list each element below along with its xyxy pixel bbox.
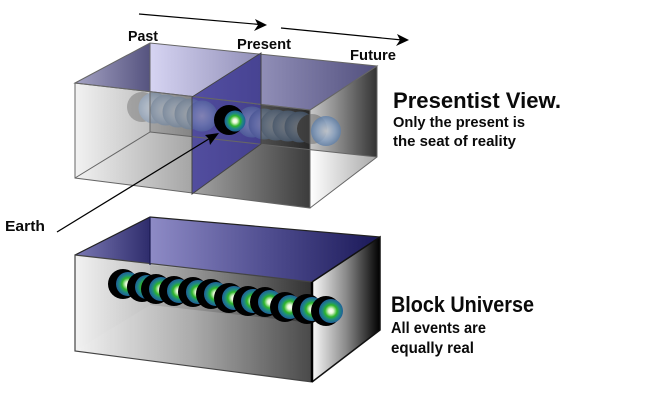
arrow: time present to future bbox=[281, 28, 409, 46]
arrow: time past to present bbox=[139, 14, 267, 31]
ghost earths bbox=[127, 92, 341, 146]
label: earth: Earth bbox=[5, 219, 45, 235]
label: future: Future bbox=[350, 48, 396, 64]
text: presentist description: the seat of reality bbox=[393, 133, 517, 150]
presentist box faces bbox=[75, 43, 377, 208]
present plane bbox=[192, 53, 261, 194]
label: past: Past bbox=[128, 29, 158, 45]
box edges bbox=[75, 217, 380, 382]
block universe bbox=[75, 217, 380, 382]
box edges bbox=[75, 43, 377, 208]
text: presentist description bbox=[393, 114, 525, 150]
heading: block universe: Block Universe bbox=[391, 292, 534, 317]
text: block universe description: All events are bbox=[391, 320, 486, 337]
earth series bbox=[108, 269, 343, 326]
label: present: Present bbox=[237, 37, 291, 53]
text: presentist description: Only the present is bbox=[393, 114, 525, 131]
earth present bbox=[214, 105, 246, 135]
block box bbox=[75, 217, 380, 382]
arrow: earth pointer bbox=[57, 133, 219, 232]
presentist block bbox=[75, 43, 377, 208]
heading: presentist view: Presentist View. bbox=[393, 88, 561, 113]
text: block universe description: equally real bbox=[391, 340, 474, 357]
text: block universe description bbox=[391, 320, 486, 357]
